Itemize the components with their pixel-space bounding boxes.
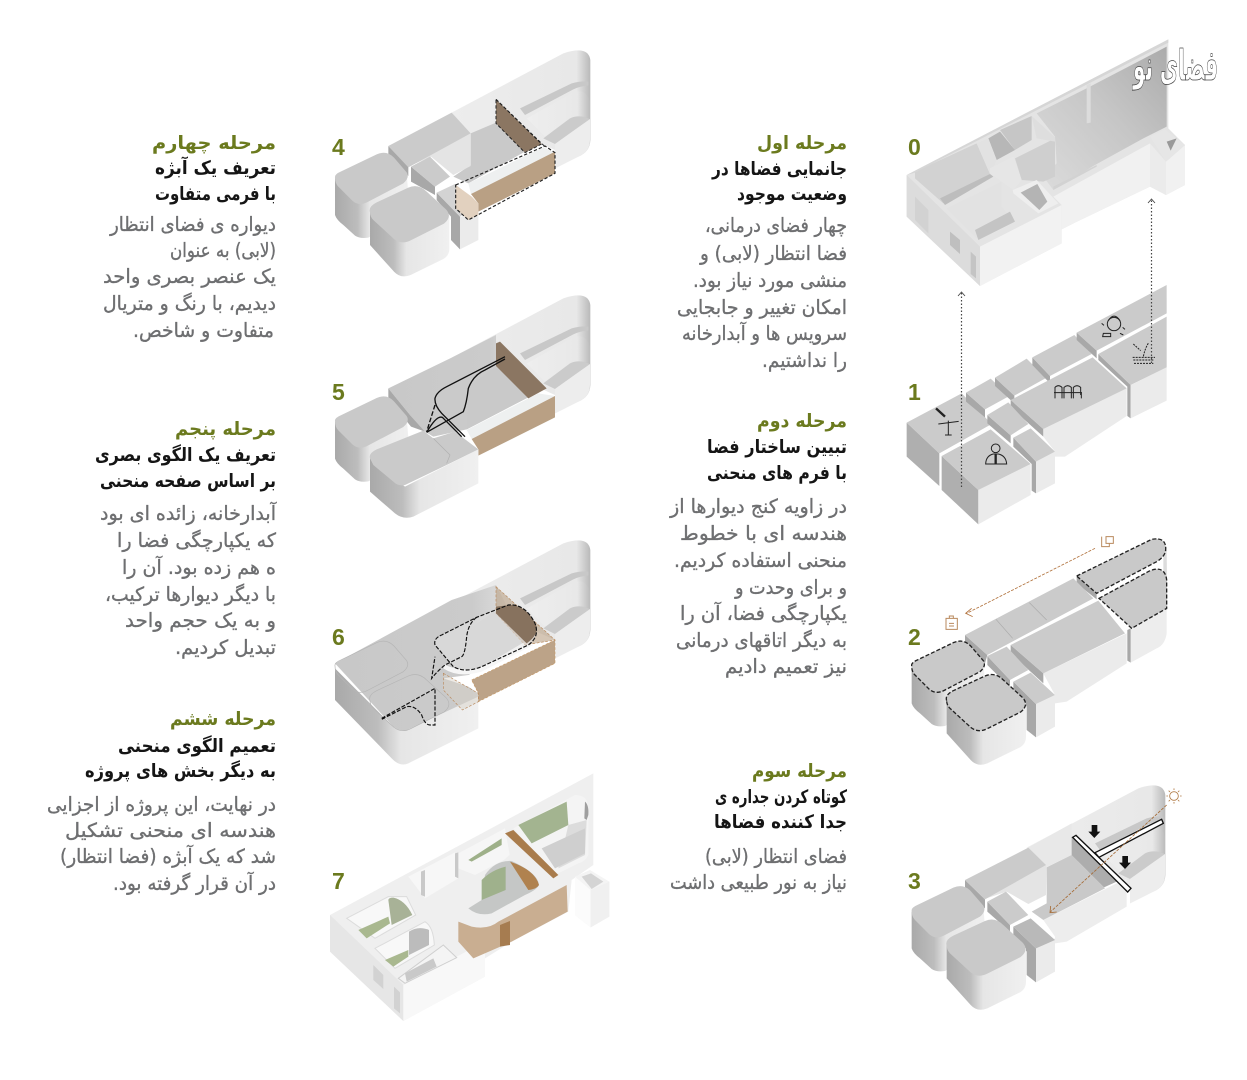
arrow: dotted up left	[958, 292, 965, 487]
subtitle: step five: تعریف یک الگوی بصری	[95, 444, 276, 466]
subtitle: step one: وضعیت موجود	[737, 184, 847, 205]
subtitle: step six: به دیگر بخش های پروژه	[85, 760, 276, 782]
paragraph: step two: به دیگر اتاقهای درمانی	[676, 629, 847, 652]
step number 5: 5	[332, 379, 345, 405]
diagram 1: program blocks with icons	[907, 285, 1167, 524]
subtitle: step five: بر اساس صفحه منحنی	[100, 471, 276, 492]
dark brown wall	[496, 99, 542, 153]
step 4 text: left column	[103, 133, 276, 342]
paragraph: step five: با دیگر دیوارها ترکیب،	[105, 583, 276, 606]
paragraph: step six: هندسه ای منحنی تشکیل	[65, 819, 276, 842]
subtitle: step four: با فرمی متفاوت	[155, 184, 276, 205]
subtitle: step four: تعریف یک آبژه	[155, 156, 276, 179]
arrow: copy direction	[966, 548, 1095, 617]
icon: waiting chairs	[1054, 386, 1082, 398]
step 6 text	[47, 709, 276, 895]
icon: injection	[936, 408, 959, 435]
subtitle: step six: تعمیم الگوی منحنی	[118, 735, 276, 757]
paragraph: step three: فضای انتظار (لابی)	[705, 845, 847, 868]
paragraph: step one	[677, 214, 847, 372]
diagram 2: rounded forms with dashed outlines	[912, 537, 1167, 765]
step 3 text	[670, 761, 847, 894]
translucent brown wall	[496, 587, 555, 645]
icon: copy	[1102, 537, 1113, 547]
icon: sun	[1166, 788, 1182, 804]
dashed rounded lower right	[1099, 569, 1167, 628]
icon: paste	[946, 616, 957, 629]
left room one	[347, 897, 416, 938]
paragraph: step one: منشی مورد نیاز بود.	[693, 269, 847, 292]
paragraph: step four: دیدیم، با رنگ و متریال	[103, 292, 276, 315]
subtitle: step four	[155, 156, 276, 205]
paragraph: step four: (لابی) به عنوان	[170, 239, 276, 262]
heading: step six: مرحله ششم	[170, 709, 276, 730]
curved opening	[435, 605, 536, 670]
paragraph: step five: آبدارخانه، زائده ای بود	[100, 501, 278, 525]
back rooms	[458, 828, 510, 875]
black curve pattern	[427, 357, 505, 437]
paragraph: step four: متفاوت و شاخص.	[133, 319, 274, 342]
paragraph: step three	[670, 845, 847, 894]
chimney shaft	[575, 870, 609, 927]
diagram 7: final rendered isometric	[330, 773, 609, 1021]
brown front wall	[472, 640, 555, 702]
step 2 text	[669, 411, 847, 678]
paragraph: step six: شد که یک آبژه (فضا انتظار)	[60, 844, 276, 868]
diagram 4: lobby wall object	[335, 50, 590, 276]
paragraph: step two	[669, 495, 847, 678]
paragraph: step six: در آن قرار گرفته بود.	[113, 871, 276, 895]
subtitle: step three	[714, 787, 847, 833]
subtitle: step two: تبیین ساختار فضا	[707, 437, 847, 458]
tan front wall	[458, 885, 568, 958]
paragraph: step five: و به یک حجم واحد	[125, 609, 276, 632]
step number 3: 3	[908, 868, 921, 894]
step number 0: 0	[908, 134, 921, 160]
subtitle: step five	[95, 444, 276, 492]
upper right lounge	[513, 795, 588, 875]
paragraph: step one: را نداشتیم.	[762, 349, 847, 372]
dashed curve lines	[382, 605, 536, 725]
heading: step four: مرحله چهارم	[152, 133, 276, 154]
icon: doctor	[986, 444, 1007, 464]
light ray	[1050, 805, 1167, 913]
paragraph: step one: چهار فضای درمانی،	[705, 214, 847, 237]
heading: step two: مرحله دوم	[757, 411, 847, 432]
paragraph: step two: هندسه ای با خطوط	[680, 522, 847, 545]
dashed room outlines	[912, 641, 1026, 731]
subtitle: step two: با فرم های منحنی	[707, 463, 847, 484]
paragraph: step two: یکپارچگی فضا، آن را	[680, 601, 847, 625]
diagram 0: existing isometric plan	[907, 39, 1185, 286]
subtitle: step three: کوتاه کردن جداره ی	[715, 787, 847, 808]
left room two	[375, 922, 434, 968]
paragraph: step two: و برای وحدت و	[734, 576, 847, 599]
icon: skin care face	[1102, 316, 1125, 337]
arrow: black down left	[1088, 825, 1100, 838]
paragraph: step five: تبدیل کردیم.	[175, 636, 276, 659]
paragraph: step five	[100, 501, 278, 659]
heading: step one: مرحله اول	[757, 133, 847, 154]
paragraph: step one: امکان تغییر و جابجایی	[677, 296, 847, 319]
paragraph: step four	[103, 213, 276, 342]
left room three	[398, 945, 457, 983]
step 1 text: right column	[677, 133, 847, 372]
wood curve panel	[510, 862, 539, 890]
step number 2: 2	[908, 624, 921, 650]
brown front wall	[471, 152, 555, 212]
dashed rounded top right	[1077, 539, 1166, 593]
paragraph: step six: در نهایت، این پروژه از اجزایی	[47, 793, 276, 816]
paragraph: step four: دیواره ی فضای انتظار	[109, 213, 276, 236]
paragraph: step two: در زاویه کنج دیوارها از	[669, 495, 847, 518]
step 5 text	[95, 419, 278, 659]
paragraph: step two: منحنی استفاده کردیم.	[674, 549, 847, 572]
heading: step three: مرحله سوم	[752, 761, 847, 782]
paragraph: step one: سرویس ها و آبدارخانه	[682, 321, 847, 345]
green wall panel	[482, 867, 506, 900]
subtitle: step two	[707, 437, 847, 484]
pale corner volume	[456, 185, 478, 220]
highlighted shortened wall	[1073, 819, 1163, 892]
subtitle: step one	[711, 159, 847, 205]
rounded treatment rooms	[912, 641, 1026, 765]
merged front block	[370, 449, 478, 518]
step number 7: 7	[332, 868, 345, 894]
diagram 6: unified volume with dashed curve	[335, 540, 590, 765]
oval curved object	[450, 851, 546, 926]
icon: hair treatment	[1133, 343, 1155, 363]
paragraph: step three: نیاز به نور طبیعی داشت	[670, 871, 847, 894]
subtitle: step six	[85, 735, 276, 782]
step number 1: 1	[908, 379, 921, 405]
paragraph: step six	[47, 793, 276, 895]
brown front wall	[472, 396, 555, 456]
arrow: black down right	[1119, 856, 1131, 869]
paragraph: step five: که یکپارچگی فضا را	[117, 529, 277, 552]
heading: step five: مرحله پنجم	[175, 419, 276, 440]
wood beam	[505, 830, 558, 878]
arrow: dotted up right	[1148, 199, 1155, 363]
subtitle: step one: جانمایی فضاها در	[711, 159, 847, 180]
paragraph: step two: نیز تعمیم دادیم	[725, 655, 847, 678]
diagram 5: curved visual pattern	[335, 295, 590, 518]
subtitle: step three: جدا کننده فضاها	[714, 812, 847, 833]
paragraph: step one: فضا انتظار (لابی) و	[699, 242, 847, 265]
diagram 3: shortened partition with daylight	[912, 785, 1182, 1010]
paragraph: step five: ه هم زده بود. آن را	[122, 555, 276, 579]
step number 4: 4	[332, 134, 345, 160]
translucent corner	[443, 673, 478, 710]
dark brown wall	[496, 342, 547, 398]
paragraph: step four: یک عنصر بصری واحد	[103, 265, 276, 288]
step number 6: 6	[332, 624, 345, 650]
